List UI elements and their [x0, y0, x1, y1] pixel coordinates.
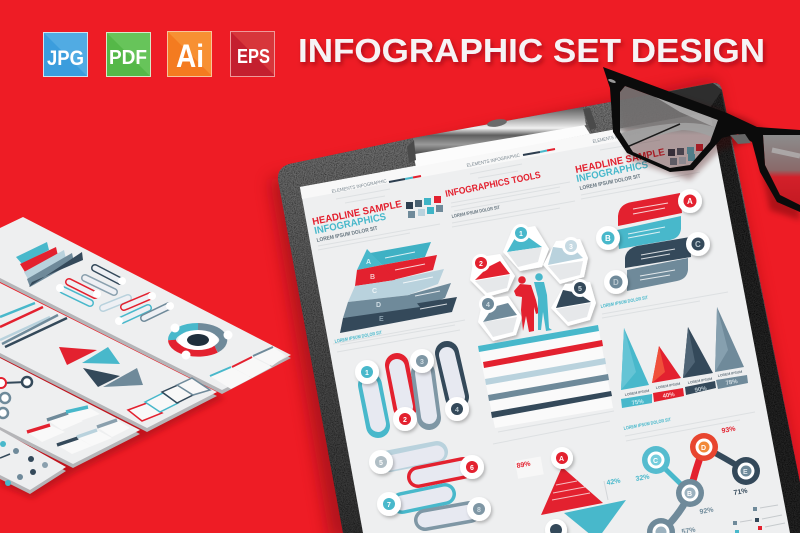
- chart: triangle pair: A: [559, 456, 564, 463]
- icon: JPG file: JPG: [47, 47, 84, 70]
- panel: paper header left: LOREM IPSUM DOLOR SIT: [579, 174, 642, 192]
- hexagon 1: 1: [519, 231, 523, 238]
- chart: option pills A to D: B: [605, 234, 611, 243]
- donut chart: [172, 327, 223, 353]
- sheet 2: [0, 283, 217, 432]
- pill 6: 6: [470, 465, 474, 472]
- chart: triangle comparison: 78%: [725, 379, 739, 387]
- pill 4: 4: [455, 407, 459, 414]
- chart: node network: 32%: [635, 474, 651, 483]
- glasses: [603, 67, 800, 220]
- paper sheet: [300, 112, 790, 533]
- chart: node network: 93%: [721, 426, 737, 435]
- panel: paper header left: LOREM IPSUM DOLOR SIT: [451, 205, 501, 220]
- pill 2: 2: [403, 417, 407, 424]
- sheet 4: [0, 430, 66, 494]
- chart: layered pyramid: C: [372, 288, 377, 295]
- chart: triangle comparison: LOREM IPSUM: [655, 382, 681, 390]
- chart: horizontal pills 5 to 8: [369, 450, 491, 521]
- icon: PDF file: PDF: [109, 47, 147, 69]
- icon: teal person: [534, 273, 552, 331]
- panel: paper header left: ELEMENTS INFOGRAPHIC: [331, 178, 388, 195]
- chart: vertical pills 1 to 4: [355, 349, 469, 431]
- icon: EPS file: EPS: [237, 46, 270, 68]
- chart: layered pyramid: A: [366, 259, 371, 266]
- panel: paper header left: INFOGRAPHICS: [313, 212, 387, 237]
- hexagon 2: 2: [479, 261, 483, 268]
- panel: paper header left: LOREM IPSUM DOLOR SIT: [316, 226, 379, 244]
- chart: layered pyramid: [340, 242, 457, 333]
- chart: layered pyramid: E: [379, 316, 384, 323]
- swatches right: [668, 144, 703, 165]
- panel: paper header left: [311, 129, 755, 444]
- chart: striped table: [478, 325, 613, 428]
- chart: node network: E: [743, 469, 748, 476]
- chart: triangle comparison: LOREM IPSUM: [717, 370, 743, 378]
- label: section heading under pyramid: LOREM IPSUM DOLOR SIT: [334, 330, 383, 345]
- pill 5: 5: [379, 460, 383, 467]
- pill 1: 1: [365, 370, 369, 377]
- icon: red person: [514, 276, 539, 332]
- chart: triangle comparison: LOREM IPSUM: [687, 377, 713, 385]
- pill 7: 7: [387, 502, 391, 509]
- chart: triangle pair: 42%: [606, 478, 622, 487]
- panel: paper header left: ELEMENTS INFOGRAPHIC: [592, 129, 643, 145]
- chart: node network: C: [653, 458, 658, 465]
- chart: node network: 92%: [699, 507, 715, 516]
- chart: node network: LOREM IPSUM DOLOR SIT: [623, 417, 672, 432]
- right dark board edge: [707, 92, 800, 533]
- icon: EPS file: [230, 32, 274, 76]
- metal clip: [407, 107, 597, 163]
- left lens glass: [620, 86, 718, 168]
- heading: infographics tools: INFOGRAPHICS TOOLS: [444, 170, 542, 200]
- icon: PDF file: [106, 32, 150, 76]
- chart: triangle pair: [515, 447, 626, 533]
- board body: [278, 83, 800, 533]
- title: INFOGRAPHIC SET DESIGN: [298, 32, 765, 69]
- icon: Ai file: [168, 32, 212, 76]
- hexagon 3: 3: [569, 244, 573, 251]
- chart: triangle comparison: 40%: [662, 392, 676, 400]
- heading: headline sample left: HEADLINE SAMPLE: [311, 199, 403, 228]
- clipboard: [270, 80, 800, 533]
- chart: node network: 71%: [733, 488, 749, 497]
- hexagon 5: 5: [578, 286, 582, 293]
- icon: Ai file: Ai: [176, 38, 204, 74]
- frame: [603, 67, 800, 212]
- panel: stacked isometric sheets: [0, 217, 291, 498]
- sheet 3: [0, 358, 140, 468]
- board shadow: [270, 80, 800, 533]
- sheet 1: [0, 217, 291, 394]
- chart: node network: B: [687, 491, 692, 498]
- chart: triangle comparison: [600, 295, 748, 408]
- glasses shadow: [612, 78, 800, 220]
- chart: triangle comparison: 75%: [631, 399, 645, 407]
- right lens glass: [763, 135, 800, 205]
- panel: paper header left: INFOGRAPHICS: [575, 160, 649, 185]
- panel: paper header left: ELEMENTS INFOGRAPHIC: [466, 153, 521, 169]
- chart: option pills A to D: D: [613, 278, 619, 287]
- pill 8: 8: [477, 507, 481, 514]
- pill 3: 3: [420, 359, 424, 366]
- nose pad: [730, 134, 751, 144]
- chart: option pills A to D: C: [695, 240, 701, 249]
- heading: headline sample right: HEADLINE SAMPLE: [574, 147, 666, 176]
- chart: triangle comparison: 90%: [694, 386, 708, 394]
- icon: JPG file: [44, 32, 88, 76]
- chart: option pills A to D: [596, 189, 710, 294]
- chart: triangle comparison: LOREM IPSUM: [624, 389, 650, 397]
- chart: hexagon tools: [470, 224, 596, 341]
- chart: node network: [623, 417, 785, 533]
- legend: [733, 505, 785, 533]
- chart: triangle comparison: LOREM IPSUM DOLOR SIT: [600, 295, 649, 310]
- chart: node network: D: [701, 445, 706, 452]
- chart: layered pyramid: B: [370, 274, 375, 281]
- board top right corner: [655, 83, 732, 140]
- chart: option pills A to D: A: [687, 197, 693, 206]
- hexagon 4: 4: [486, 302, 490, 309]
- chart: triangle pair: 89%: [516, 461, 532, 470]
- chart: layered pyramid: D: [376, 302, 381, 309]
- swatches left: [406, 196, 443, 218]
